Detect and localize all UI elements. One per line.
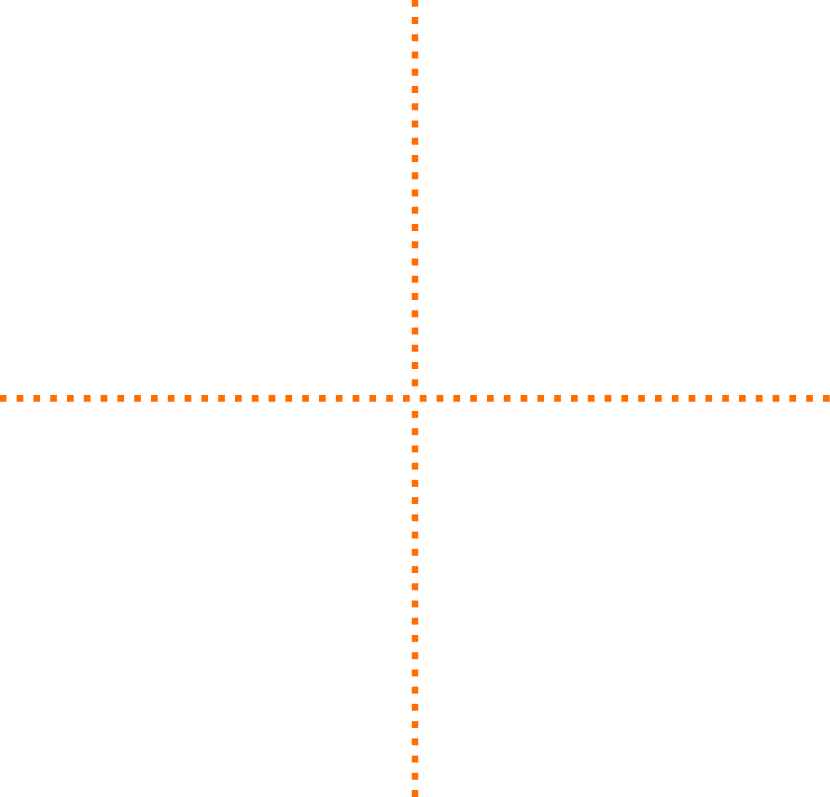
vertical dotted line: lower segment [412,411,418,797]
horizontal dotted line [0,395,830,402]
vertical dotted line: upper segment [412,0,418,388]
